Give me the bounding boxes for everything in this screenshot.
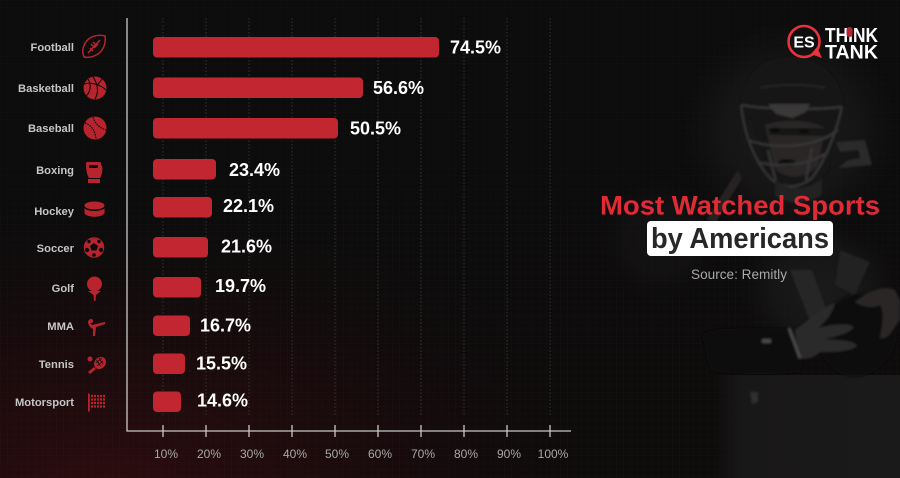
face xyxy=(752,114,836,185)
row: Baseball xyxy=(28,116,401,140)
row: Golf: Golf xyxy=(52,283,74,295)
row: Baseball: 50.5% xyxy=(350,118,401,138)
row: Baseball: Baseball xyxy=(28,123,74,135)
row: Golf: 19.7% xyxy=(215,276,266,296)
title highlight: by Americans xyxy=(651,223,829,255)
source: Source: Remitly xyxy=(691,267,787,282)
x axis labels: 20% xyxy=(197,447,221,461)
row: Golf xyxy=(52,276,266,301)
row: Boxing: 23.4% xyxy=(229,160,280,180)
row: Motorsport: 14.6% xyxy=(197,390,248,410)
row: Tennis: 15.5% xyxy=(196,354,247,374)
row: Tennis: Tennis xyxy=(39,359,74,371)
ball xyxy=(806,281,900,389)
row: Hockey: Hockey xyxy=(34,206,75,218)
x axis labels xyxy=(154,447,569,461)
jersey number xyxy=(836,140,872,168)
x axis labels: 30% xyxy=(240,447,264,461)
row: Basketball: Basketball xyxy=(18,83,74,95)
x axis labels: 60% xyxy=(368,447,392,461)
row: Soccer: 21.6% xyxy=(221,236,272,256)
face mask xyxy=(741,105,842,187)
x axis labels: 70% xyxy=(411,447,435,461)
row: Boxing: Boxing xyxy=(36,165,74,177)
chart axes xyxy=(127,18,571,437)
row: Football: 74.5% xyxy=(450,38,501,58)
logo: ES Think Tank xyxy=(788,25,878,64)
row: Soccer: Soccer xyxy=(37,243,75,255)
forearm xyxy=(702,328,805,374)
x axis labels: 10% xyxy=(154,447,178,461)
logo: ES Think Tank: ES xyxy=(793,34,815,52)
row: MMA: MMA xyxy=(47,321,74,333)
background photo: football player xyxy=(600,20,900,478)
x axis labels: 100% xyxy=(538,447,569,461)
row: Tennis xyxy=(39,354,247,374)
sleeve and stripes xyxy=(790,270,830,326)
logo: ES Think Tank: TANK xyxy=(825,42,878,64)
x axis labels: 80% xyxy=(454,447,478,461)
row: MMA xyxy=(47,316,251,336)
row: Motorsport: Motorsport xyxy=(15,397,74,409)
row: Hockey: 22.1% xyxy=(223,196,274,216)
row: MMA: 16.7% xyxy=(200,316,251,336)
row: Boxing xyxy=(36,159,280,183)
row: Football: Football xyxy=(30,42,74,54)
logo: ES Think Tank: THINK xyxy=(825,25,878,47)
x axis labels: 90% xyxy=(497,447,521,461)
row: Basketball xyxy=(18,76,424,100)
row: Basketball: 56.6% xyxy=(373,78,424,98)
row: Soccer xyxy=(37,236,272,258)
title xyxy=(600,190,880,256)
x axis labels: 50% xyxy=(325,447,349,461)
row: Motorsport xyxy=(15,390,248,412)
hands xyxy=(795,303,857,359)
row: Football xyxy=(30,35,501,58)
title: Most Watched Sports xyxy=(600,190,880,220)
row: Hockey xyxy=(34,196,274,218)
helmet shell xyxy=(741,57,844,118)
x axis labels: 40% xyxy=(283,447,307,461)
